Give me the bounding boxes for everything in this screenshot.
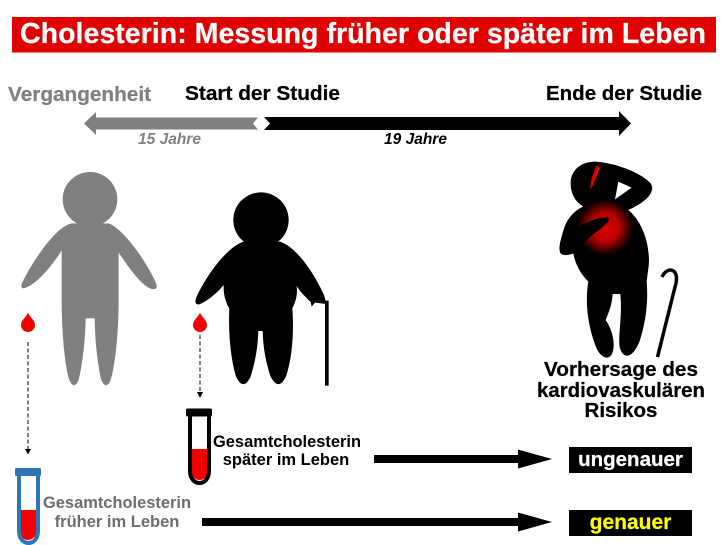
text: prediction of cardiovascular risk: Risikos <box>585 399 657 422</box>
arrow: 15 years back <box>84 112 258 135</box>
figure: person with heart attack and stroke <box>559 162 652 358</box>
text: prediction of cardiovascular risk: Vorhersage des <box>544 358 698 381</box>
text: prediction of cardiovascular risk <box>537 358 705 422</box>
white gap between head and arm <box>615 182 632 199</box>
label: cholesterol later in life: später im Leben <box>223 451 349 469</box>
label: cholesterol later in life <box>213 433 361 469</box>
box: more precise: genauer <box>590 511 671 534</box>
figure: grey person <box>21 172 157 385</box>
figure: black older person with cane <box>195 192 329 386</box>
icon: cane <box>658 270 676 357</box>
label: 19 Jahre: 19 Jahre <box>384 131 447 148</box>
dashed arrow: drop to tube 1 <box>25 342 31 454</box>
box: more precise <box>569 510 692 536</box>
text: prediction of cardiovascular risk: kardiovaskulären <box>537 379 705 402</box>
dashed arrow: drop to tube 2 <box>197 335 203 398</box>
icon: test tube early <box>15 468 41 543</box>
label: cholesterol early in life <box>43 494 191 531</box>
icon: blood drop 1 <box>21 312 35 332</box>
label: cholesterol early in life: früher im Leben <box>55 513 179 531</box>
box: less precise: ungenauer <box>578 448 683 471</box>
timeline heading: Start der Studie: Start der Studie <box>185 82 340 105</box>
timeline heading: Ende der Studie: Ende der Studie <box>546 82 702 105</box>
arrow: late measurement to less precise <box>374 450 552 468</box>
arm across chest <box>562 217 609 253</box>
chest pain glow <box>577 199 633 255</box>
head pain mark <box>590 165 600 189</box>
arrow: early measurement to more precise <box>202 512 552 532</box>
icon: test tube late <box>186 408 212 483</box>
timeline heading: Vergangenheit: Vergangenheit <box>8 83 151 106</box>
icon: blood drop 2 <box>193 312 207 332</box>
label: 15 Jahre: 15 Jahre <box>138 131 201 148</box>
title: Cholesterin: Messung früher oder später im Leben <box>20 18 706 50</box>
arrow: 19 years forward <box>264 111 631 136</box>
label: cholesterol early in life: Gesamtcholesterin <box>43 494 191 512</box>
label: cholesterol later in life: Gesamtcholesterin <box>213 433 361 451</box>
